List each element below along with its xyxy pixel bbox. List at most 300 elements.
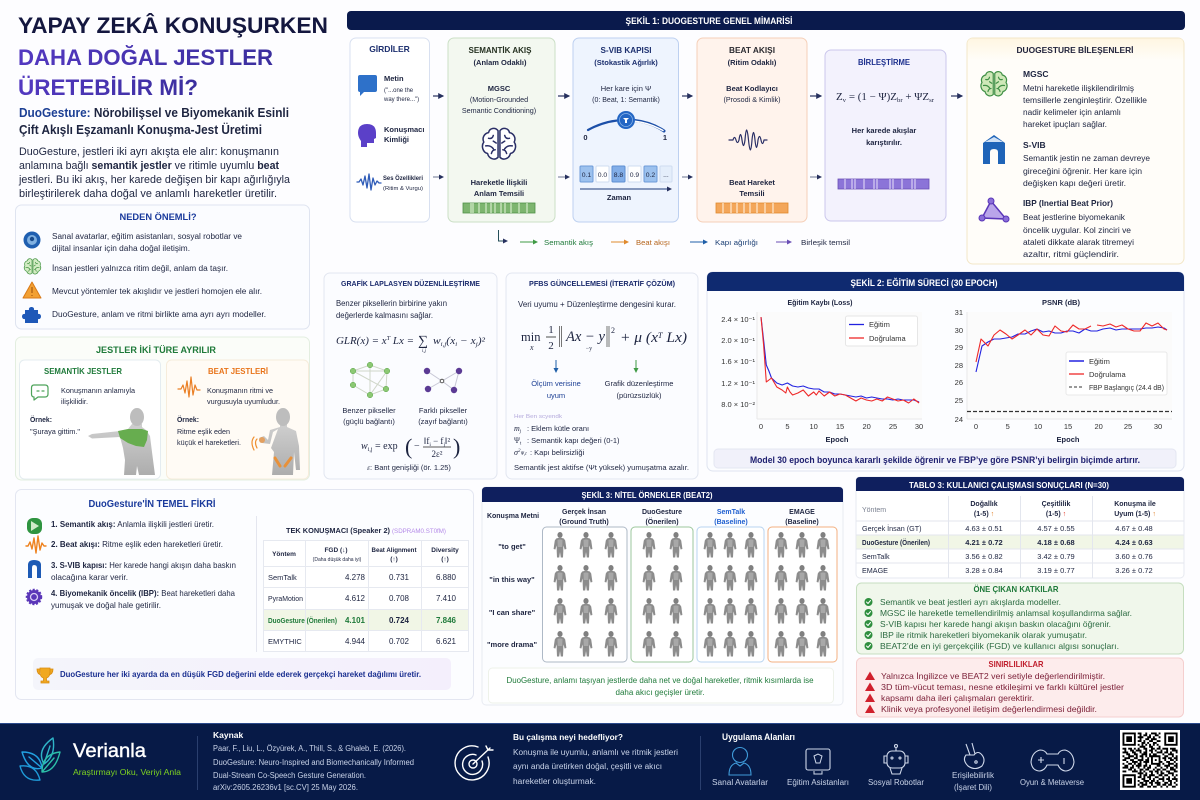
- chart: PSNR: 0: [974, 422, 978, 431]
- application: accessibility: (İşaret Dili): [954, 783, 992, 792]
- chart: PSNR: 15: [1064, 422, 1072, 431]
- panel: components: DUOGESTURE BİLEŞENLERİ: [1016, 45, 1134, 55]
- formula: merge: sr: [929, 97, 935, 104]
- item 2: beat stream: 2. Beat akışı: Ritme eşlik eden hareketleri üretir.: [51, 540, 223, 549]
- formula: weight: (: [405, 434, 412, 459]
- panel: figure 2 training: [707, 272, 1184, 471]
- definitions: symbols: 2: [518, 449, 521, 454]
- formula: merge: br: [897, 97, 904, 104]
- chart: training loss: 1.6 × 10⁻¹: [721, 357, 755, 366]
- QR code: [1120, 730, 1180, 790]
- formula: GLR: [336, 334, 486, 354]
- warning icons: [865, 672, 875, 713]
- sub-panel: semantic gestures: [20, 360, 160, 479]
- formula: weight: j: [442, 442, 445, 448]
- panel: table 3 user study: 3.56 ± 0.82: [965, 552, 1003, 561]
- labels: formula annotations: [531, 379, 673, 400]
- panel: table 3 user study: 4.57 ± 0.55: [1037, 524, 1075, 533]
- panel: table 3 user study: 3.42 ± 0.79: [1037, 552, 1075, 561]
- arrow: time axis: [580, 188, 671, 190]
- column headings: SemTalk: [717, 509, 745, 516]
- icon: puzzle: [22, 307, 41, 323]
- item 4: biomechanical prior: [27, 589, 235, 610]
- icon: target: [455, 746, 493, 780]
- chart: training loss: 25: [889, 422, 897, 431]
- intro text: DuoGesture, jestleri iki ayrı akışta ele alır: konuşmanın: [19, 146, 279, 158]
- panel: contributions: [856, 583, 1184, 654]
- chart: PSNR: 25: [1124, 422, 1132, 431]
- panel: table 3 user study: Çeşitlilik: [1042, 501, 1070, 508]
- list: contributions: S-VIB kapısı her karede hangi akışın baskın olacağını öğrenir.: [880, 620, 1111, 629]
- header: figure 2: ŞEKİL 2: EĞİTİM SÜRECİ (30 EPOCH): [850, 277, 998, 288]
- gauge: gate value: 1: [663, 133, 667, 142]
- figure: pointing avatar: [88, 408, 155, 475]
- formula: merge: v: [843, 97, 847, 104]
- panel: table 3 user study: [856, 477, 1184, 578]
- title: ÜRETEBİLİR Mİ?: [18, 75, 198, 100]
- panel: table 3 user study: 3.60 ± 0.76: [1115, 552, 1153, 561]
- panel: S-VIB gate: S-VIB KAPISI: [600, 45, 652, 55]
- arrows: beat to merge: [810, 96, 821, 177]
- application: avatars: [712, 748, 768, 787]
- text: beat example: küçük el hareketleri.: [177, 438, 241, 447]
- chart: training loss: 30: [915, 422, 923, 431]
- definitions: symbols: Ψ,t: [520, 452, 527, 457]
- labels: formula annotations: Ölçüm verisine: [531, 379, 581, 388]
- chart: PSNR: 26: [955, 378, 963, 387]
- icon: audio wave: [357, 174, 381, 190]
- labels: graphs: Farklı pikseller: [419, 406, 468, 415]
- formula: GLR: − x: [457, 336, 476, 347]
- source: [213, 730, 414, 792]
- formula: GLR: j: [475, 342, 478, 348]
- table: single speaker: 0.708: [389, 594, 410, 603]
- chart: PSNR: 25: [955, 396, 963, 405]
- row labels: "more drama": [487, 640, 537, 649]
- legend: architecture flows: Birleşik temsil: [801, 238, 850, 247]
- source: Kaynak: [213, 730, 244, 740]
- callout: lowest FGD: [33, 658, 451, 690]
- panel: semantic stream: (Motion-Grounded: [470, 95, 528, 104]
- formula: weight: ‖f: [424, 436, 429, 446]
- text: beat description: [207, 386, 280, 406]
- graph: similar pixels: [350, 362, 390, 398]
- line: PSNR validation: [976, 323, 1167, 362]
- formula: merge: = (1 − Ψ)Z: [846, 92, 897, 103]
- definitions: symbols: : Eklem kütle oranı: [527, 424, 589, 433]
- panel: table 3 user study: (1-5) ↑: [974, 511, 994, 518]
- text: beat example: Örnek:: [177, 415, 199, 424]
- text: MGSC: temsillerle zenginleştirir. Özellikle: [1023, 96, 1148, 105]
- panel: beat stream: (Prosodi & Kimlik): [723, 95, 781, 104]
- icon: warning: [23, 282, 41, 298]
- chart: PSNR: PSNR (dB): [1042, 298, 1080, 307]
- goal text: aynı anda üretirken doğal, çeşitli ve akıcı: [513, 762, 662, 771]
- text: IBP: ataleti dikkate alarak titremeyi: [1023, 238, 1134, 247]
- chart: training loss: Eğitim Kaybı (Loss): [788, 298, 853, 307]
- text: MGSC: nadir kelimeler için anlamlı: [1023, 108, 1121, 117]
- header: figure 3: [482, 487, 843, 502]
- table: single speaker: (Daha düşük daha iyi): [313, 557, 362, 563]
- panel: table 3 user study: Konuşma ile: [1114, 501, 1156, 508]
- panel: table 3 user study: Uyum (1-5) ↑: [1114, 511, 1156, 518]
- goal text: hareketler oluşturmak.: [513, 777, 596, 786]
- chart: training loss: 8.0 × 10⁻²: [721, 400, 755, 409]
- legend: PSNR: Eğitim: [1089, 357, 1110, 366]
- table: single speaker: 0.731: [389, 573, 410, 582]
- legend: architecture flows: [498, 230, 850, 247]
- definitions: symbols: j: [519, 430, 522, 434]
- row labels: "in this way": [489, 575, 535, 584]
- panel: inputs: GİRDİLER: [369, 44, 410, 54]
- chart: training loss: Epoch: [826, 435, 849, 444]
- cells: gate values over time: 0.0: [598, 172, 607, 179]
- text: beat example: [177, 415, 241, 447]
- table: single speaker: (↑): [390, 556, 398, 563]
- formula: PFBS: −y: [586, 346, 592, 352]
- chart: training loss: 20: [863, 422, 871, 431]
- text: semantic description: ilişkilidir.: [61, 397, 88, 406]
- panel: S-VIB gate: Her kare için Ψ: [601, 84, 651, 93]
- icon: beat waveform: [729, 130, 767, 150]
- legend: PSNR: Doğrulama: [1089, 370, 1127, 379]
- text: avatars: dijital insanlar için daha doğal iletişim.: [52, 244, 190, 253]
- table: single speaker: 7.846: [436, 616, 457, 625]
- panel: semantic stream: Semantic Conditioning): [462, 106, 536, 115]
- icon: trophy: [37, 668, 53, 683]
- chart: PSNR: 31: [955, 308, 963, 317]
- formula: weight: 2ε²: [432, 449, 443, 459]
- labels: graphs: (güçlü bağlantı): [343, 417, 395, 426]
- footer: [0, 723, 1200, 800]
- arrows: semantic to gate: [558, 96, 569, 177]
- text: beat description: Konuşmanın ritmi ve: [207, 386, 273, 395]
- chart: training loss: 0: [759, 422, 763, 431]
- panel: table 3 user study: 3.19 ± 0.77: [1037, 566, 1075, 575]
- subtitle: DuoGesture: Nörobilişsel ve Biyomekanik Esinli: [19, 106, 289, 120]
- chart: PSNR: 29: [955, 343, 963, 352]
- panel: semantic stream: SEMANTİK AKIŞ: [468, 45, 532, 55]
- text: metin: [383, 74, 419, 103]
- text: MGSC: Metni hareketle ilişkilendirilmiş: [1023, 84, 1134, 93]
- formula: weight: ‖²: [445, 436, 450, 446]
- definitions: symbols: : Semantik kapı değeri (0-1): [527, 436, 620, 445]
- panel: table 3 user study: SemTalk: [862, 552, 890, 561]
- legend: PSNR: [1066, 352, 1167, 395]
- logo: leaves: [20, 738, 60, 780]
- legend: PSNR: FBP Başlangıç (24.4 dB): [1089, 383, 1164, 392]
- text: S-VIB: değişken kapı değeri üretir.: [1023, 179, 1126, 188]
- table: single speaker: FGD (↓): [324, 547, 348, 554]
- panel: components: [967, 38, 1184, 264]
- line: validation: [761, 317, 919, 403]
- panel: merge: BİRLEŞTİRME: [858, 57, 910, 67]
- text: semantic description: Konuşmanın anlamıyla: [61, 386, 136, 395]
- subtitle: [19, 106, 289, 137]
- application: social robots: Sosyal Robotlar: [868, 778, 924, 787]
- cells: gate values over time: 8.8: [614, 172, 623, 179]
- callout: lowest FGD: DuoGesture her iki ayarda da en düşük FGD değerini elde ederek gerçekçi hareket dağılımı üretir.: [60, 669, 421, 679]
- header: figure 3: ŞEKİL 3: NİTEL ÖRNEKLER (BEAT2): [582, 490, 713, 500]
- brand: Verianla: [73, 741, 146, 762]
- application: avatars: Sanal Avatarlar: [712, 778, 768, 787]
- table: single speaker: 4.612: [345, 594, 366, 603]
- formula: PFBS: + μ (x: [620, 330, 657, 346]
- panel: PFBS update: Veri uyumu + Düzenleştirme dengesini kurar.: [518, 300, 676, 309]
- chart: PSNR: 30: [955, 326, 963, 335]
- list: limitations: kapsamı daha ileri çalışmaları gerektirir.: [881, 694, 1034, 703]
- panel: table 3 user study: 4.24 ± 0.63: [1115, 538, 1153, 547]
- text: metin: Metin: [384, 74, 404, 83]
- item 3: S-VIB gate: olacağına karar verir.: [51, 573, 128, 582]
- panel: limitations: [856, 658, 1184, 717]
- definitions: symbols: σ: [514, 448, 518, 457]
- formula: PFBS: min: [521, 330, 541, 344]
- text: semantic example: Örnek:: [30, 415, 52, 424]
- panel: S-VIB gate: Zaman: [607, 193, 631, 202]
- chart: PSNR: 24: [955, 415, 963, 424]
- panel: table 3 user study: 3.26 ± 0.72: [1115, 566, 1153, 575]
- text: existing methods: Mevcut yöntemler tek akışlıdır ve jestleri homojen ele alır.: [52, 287, 262, 296]
- text: beat description: vurgusuyla uyumludur.: [207, 397, 280, 406]
- formula: GLR: i,j: [441, 342, 447, 348]
- panel: graph laplacian: GRAFİK LAPLASYEN DÜZENLİLEŞTİRME: [341, 279, 480, 288]
- table: single speaker: 4.944: [345, 637, 366, 646]
- chart: training loss: 2.4 × 10⁻¹: [721, 315, 755, 324]
- formula: PFBS: [521, 324, 687, 352]
- panel: table 3 user study: 4.18 ± 0.68: [1037, 538, 1075, 547]
- table: single speaker: 6.880: [436, 573, 457, 582]
- chart: PSNR: 30: [1154, 422, 1162, 431]
- formula: merge: + ΨZ: [903, 92, 929, 103]
- text: audio features: [383, 175, 423, 192]
- list: contributions: Semantik ve beat jestleri ayrı akışlarda modeller.: [880, 598, 1061, 607]
- bar: beat representation: [716, 203, 788, 213]
- icon: brain outline: [482, 128, 516, 159]
- icon: MGSC brain: [981, 72, 1007, 96]
- cells: gate values over time: ...: [663, 172, 669, 179]
- table: single speaker: EMYTHIC: [268, 637, 302, 646]
- arrow: merge to components: [951, 95, 962, 97]
- text: speaker: Kimliği: [384, 135, 409, 144]
- panel: graph laplacian: [324, 273, 497, 479]
- panel: semantic stream: [448, 38, 555, 222]
- text: audio features: (Ritim & Vurgu): [383, 186, 423, 192]
- panel: merge: Her karede akışlar: [852, 126, 916, 135]
- table: single speaker: Diversity: [431, 547, 459, 554]
- table: single speaker: Yöntem: [272, 551, 296, 558]
- title: YAPAY ZEKÂ KONUŞURKEN: [18, 13, 328, 38]
- text: IBP: Beat jestlerine biyomekanik: [1023, 213, 1126, 222]
- panel: semantic stream: Hareketle İlişkili: [471, 178, 527, 187]
- panel: beat stream: [697, 38, 807, 222]
- table: single speaker: 4.101: [345, 616, 366, 625]
- text: MGSC: hareket ipuçları sağlar.: [1023, 120, 1107, 129]
- legend: architecture flows: Semantik akış: [544, 238, 593, 247]
- title: [18, 13, 328, 100]
- goal text: Bu çalışma neyi hedefliyor?: [513, 732, 623, 742]
- labels: graphs: Benzer pikseller: [342, 406, 396, 415]
- formula: PFBS: x: [529, 343, 534, 352]
- table: single speaker: 0.724: [389, 616, 410, 625]
- line: training: [761, 317, 919, 402]
- avatars grid: [554, 532, 829, 656]
- column headings: Gerçek İnsan: [562, 508, 606, 516]
- application: teaching assistants: Eğitim Asistanları: [787, 778, 849, 787]
- text: semantic description: [61, 386, 136, 406]
- formula: GLR: (x: [446, 336, 456, 347]
- icon: text input: [358, 75, 377, 96]
- intro text: anlamına bağlı semantik jestler ve ritimle uyumlu beat: [19, 160, 279, 172]
- chart: PSNR: 10: [1034, 422, 1042, 431]
- note: qualitative result: [488, 668, 834, 703]
- text: semantic example: "Şuraya gittim.": [30, 427, 80, 436]
- panel: table 3 user study: 4.63 ± 0.51: [965, 524, 1003, 533]
- note: training takeaway: [714, 449, 1176, 468]
- application: teaching assistants: [787, 749, 849, 787]
- source: DuoGesture: Neuro-Inspired and Biomechanically Informed: [213, 758, 414, 767]
- formula: PFBS: Ax − y: [565, 329, 605, 345]
- panel: PFBS update: PFBS GÜNCELLEMESİ (İTERATİF ÇÖZÜM): [529, 279, 675, 288]
- text: semantic example: [30, 415, 80, 436]
- panel: graph laplacian: değerlerde kalmasını sağlar.: [336, 311, 433, 320]
- text: IBP: azaltır, ritmi güçlendirir.: [1023, 250, 1119, 259]
- chart: PSNR: 28: [955, 361, 963, 370]
- graph: different pixels: [424, 368, 462, 393]
- table: single speaker: 0.702: [389, 637, 410, 646]
- intro text: jestleri. Bu iki akış, her karede değişen bir kapı ağırlığıyla: [18, 174, 290, 186]
- formula: GLR: GLR(x) = x: [336, 335, 387, 347]
- bar: fused representation: [838, 179, 929, 189]
- formula: GLR: w: [433, 336, 440, 347]
- table title: (SDPRAM0.ST0fM): [392, 528, 446, 535]
- panel: table 3 user study: 3.28 ± 0.84: [965, 566, 1003, 575]
- panel: graph laplacian: Benzer piksellerin birbirine yakın: [336, 299, 447, 308]
- formula: PFBS: Lx): [663, 330, 687, 346]
- list: contributions: [880, 598, 1132, 651]
- panel: semantic stream: MGSC: [488, 84, 511, 93]
- panel: core idea: [16, 490, 474, 700]
- formula: GLR: i,j: [422, 349, 427, 354]
- application: gaming: [1020, 750, 1085, 787]
- source: Dual-Stream Co-Speech Gesture Generation.: [213, 771, 366, 780]
- cells: gate values over time: 0.1: [582, 172, 591, 179]
- chart: PSNR: 20: [1095, 422, 1103, 431]
- panel: inputs: [350, 38, 430, 222]
- title: DAHA DOĞAL JESTLER: [18, 45, 273, 70]
- list: contributions: BEAT2’de en iyi gerçekçilik (FGD) ve kullanıcı algısı sonuçları.: [880, 642, 1119, 651]
- panel: PFBS update: [506, 273, 698, 479]
- source: arXiv:2605.26236v1 [sc.CV] 25 May 2026.: [213, 783, 358, 792]
- definitions: symbols: t: [520, 442, 522, 446]
- note: qualitative result: daha akıcı geçişler üretir.: [616, 688, 704, 697]
- brand: Araştırmayı Oku, Veriyi Anla: [73, 768, 182, 777]
- heading: neden önemli: NEDEN ÖNEMLİ?: [120, 212, 197, 223]
- panel: two gesture types: [16, 337, 310, 480]
- column headings: EMAGE: [789, 509, 815, 516]
- text: duogesture models: DuoGesture, anlam ve ritmi birlikte ama ayrı ayrı modeller.: [52, 310, 266, 319]
- labels: graphs: (zayıf bağlantı): [418, 417, 468, 426]
- panel: beat stream: Beat Kodlayıcı: [726, 84, 778, 93]
- formula: PFBS: 1: [548, 324, 554, 336]
- legend: loss: [846, 316, 918, 346]
- panel: S-VIB gate: (Stokastik Ağırlık): [594, 58, 658, 67]
- column headings: (Ground Truth): [559, 519, 609, 526]
- text: IBP: öncelik uygular. Kol zinciri ve: [1023, 226, 1132, 235]
- text: speaker: [384, 125, 424, 144]
- application: accessibility: Erişilebilirlik: [952, 771, 994, 780]
- list: contributions: MGSC ile hareketle temellendirilmiş anlamsal koşullandırma sağlar.: [880, 609, 1132, 618]
- formula: PFBS: T: [658, 331, 663, 340]
- definitions: symbols: m: [514, 424, 520, 433]
- text: metin: way there..."): [383, 97, 419, 103]
- definitions: symbols: : Kapı belirsizliği: [530, 448, 585, 457]
- table: single speaker: Beat Alignment: [372, 547, 417, 554]
- legend: loss: Eğitim: [869, 320, 890, 329]
- item 3: S-VIB gate: [28, 560, 236, 582]
- chart: PSNR: [955, 298, 1172, 444]
- formula: PFBS: 2: [548, 340, 554, 352]
- text: speaker: Konuşmacı: [384, 125, 424, 134]
- icon: waveform: [178, 377, 200, 397]
- icon: brain: [24, 259, 41, 274]
- panel: figure 3 qualitative: [482, 487, 843, 705]
- panel: contributions: ÖNE ÇIKAN KATKILAR: [974, 584, 1058, 594]
- table: single speaker: SemTalk: [268, 573, 297, 582]
- formula: GLR: )²: [477, 336, 486, 347]
- column frames: [542, 527, 837, 662]
- chart: training loss: [721, 298, 923, 444]
- panel: table 3 user study: Gerçek İnsan (GT): [862, 524, 922, 533]
- panel: table 3 user study: Yöntem: [862, 507, 886, 514]
- text: S-VIB: [1023, 140, 1151, 188]
- labels: graphs: [342, 406, 468, 426]
- header: figure 2: [707, 272, 1184, 291]
- table title: TEK KONUŞMACI (Speaker 2): [286, 526, 390, 535]
- text: avatars: [52, 232, 243, 253]
- figure: beat avatar: [252, 408, 300, 475]
- chart: PSNR: 5: [1006, 422, 1010, 431]
- formula: merge: Z: [836, 92, 842, 103]
- panel: table 3 user study: DuoGesture (Önerilen): [862, 538, 931, 547]
- column headings: (Baseline): [785, 519, 819, 526]
- item 4: biomechanical prior: 4. Biyomekanik öncelik (IBP): Beat hareketleri daha: [51, 589, 235, 598]
- intro text: birleştirilerek daha doğal ve anlamlı hareketler üretilir.: [19, 188, 277, 200]
- cells: gate values over time: 0.9: [630, 172, 639, 179]
- list: contributions: IBP ile ritmik hareketleri biyomekanik olarak yumuşatır.: [880, 631, 1087, 640]
- item 4: biomechanical prior: yumuşak ve doğal hale getirilir.: [51, 601, 161, 610]
- header: table 3: [856, 477, 1184, 491]
- column headings: (Önerilen): [645, 517, 679, 526]
- table: single speaker: (↑): [441, 556, 449, 563]
- sub-panel: beat gestures: [166, 360, 308, 479]
- panel: beat stream: BEAT AKIŞI: [729, 45, 775, 55]
- icon: S-VIB gate: [983, 135, 1005, 164]
- application: social robots: [868, 744, 924, 787]
- formula: GLR: Lx =: [390, 335, 414, 347]
- application: accessibility: [952, 743, 994, 792]
- chart: training loss: 2.0 × 10⁻¹: [721, 336, 755, 345]
- arrows: gate to beat: [682, 96, 692, 177]
- icon: avatar circle: [24, 232, 40, 248]
- column headings: DuoGesture: [642, 509, 682, 516]
- text: metin: ("...one the: [384, 88, 414, 94]
- chart: PSNR: Epoch: [1057, 435, 1080, 444]
- column headings: (Baseline): [714, 519, 748, 526]
- panel: table 3 user study: 4.67 ± 0.48: [1115, 524, 1153, 533]
- panel: PFBS update: Semantik jest aktifse (Ψt yüksek) yumuşatma azalır.: [514, 463, 689, 472]
- table: single speaker: 6.621: [436, 637, 457, 646]
